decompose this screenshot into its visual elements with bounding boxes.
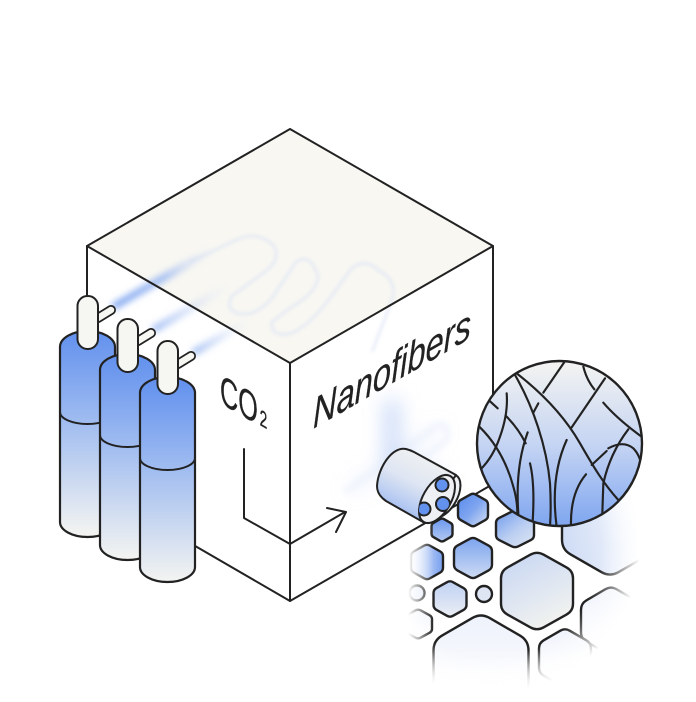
tube face bbox=[412, 469, 462, 529]
gas streaks from cylinder pipes bbox=[113, 248, 250, 353]
label: CO2: CO bbox=[220, 365, 258, 434]
tube body bbox=[377, 449, 456, 522]
cube: edges bbox=[87, 129, 493, 601]
cylinder 2 bbox=[100, 319, 155, 560]
cylinder 1 bbox=[60, 296, 115, 537]
faint loop on right face bbox=[345, 425, 448, 492]
magnifier outline bbox=[477, 361, 642, 526]
small tube with pores bbox=[377, 449, 467, 529]
tube pores bbox=[418, 478, 450, 516]
arrow: CO2 flow to nanofibers bbox=[244, 449, 346, 544]
hexagon mesh bbox=[409, 492, 638, 684]
magnifier circle with fibers bbox=[477, 361, 642, 527]
faint fiber path on top face bbox=[190, 236, 393, 352]
cube: top face bbox=[87, 129, 493, 363]
glow on right face bbox=[350, 400, 440, 490]
cube bbox=[87, 129, 493, 601]
tube back rim bbox=[421, 469, 467, 523]
label: Nanofibers: Nanofibers bbox=[313, 299, 471, 438]
fibers bbox=[479, 363, 641, 527]
illustration: CO2 to nanofibers cube bbox=[58, 128, 644, 684]
label: CO2: 2 bbox=[260, 405, 267, 435]
cylinder 3 bbox=[140, 341, 195, 582]
